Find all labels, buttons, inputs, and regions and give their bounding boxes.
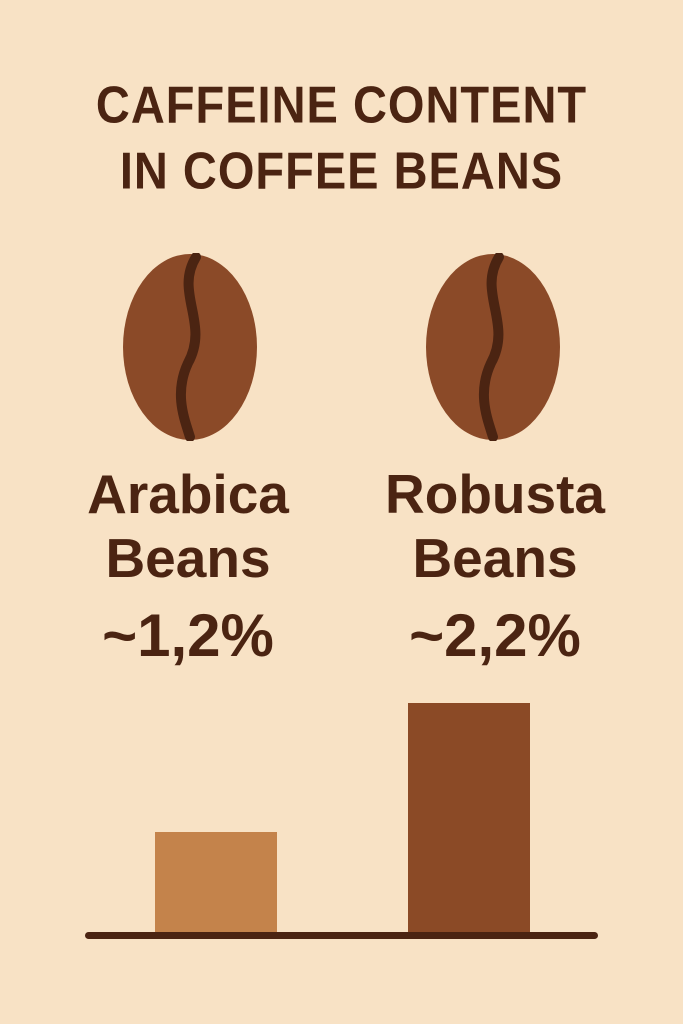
title: CAFFEINE CONTENT [96, 75, 587, 134]
axis baseline [85, 932, 598, 939]
bar chart [85, 703, 598, 939]
title: IN COFFEE BEANS [120, 141, 563, 200]
label: robusta [385, 463, 606, 669]
label: arabica [87, 463, 290, 669]
label: robusta: Robusta [385, 463, 605, 525]
label: arabica: Beans [105, 527, 271, 589]
label: robusta: Beans [412, 527, 578, 589]
icon: robusta bean [426, 253, 560, 441]
icon: arabica bean [123, 253, 257, 441]
label: arabica: ~1,2% [102, 602, 274, 669]
label: robusta: ~2,2% [409, 602, 581, 669]
label: arabica: Arabica [87, 463, 289, 525]
title [96, 75, 587, 200]
bar: robusta [408, 703, 530, 936]
bar: arabica [155, 832, 277, 936]
